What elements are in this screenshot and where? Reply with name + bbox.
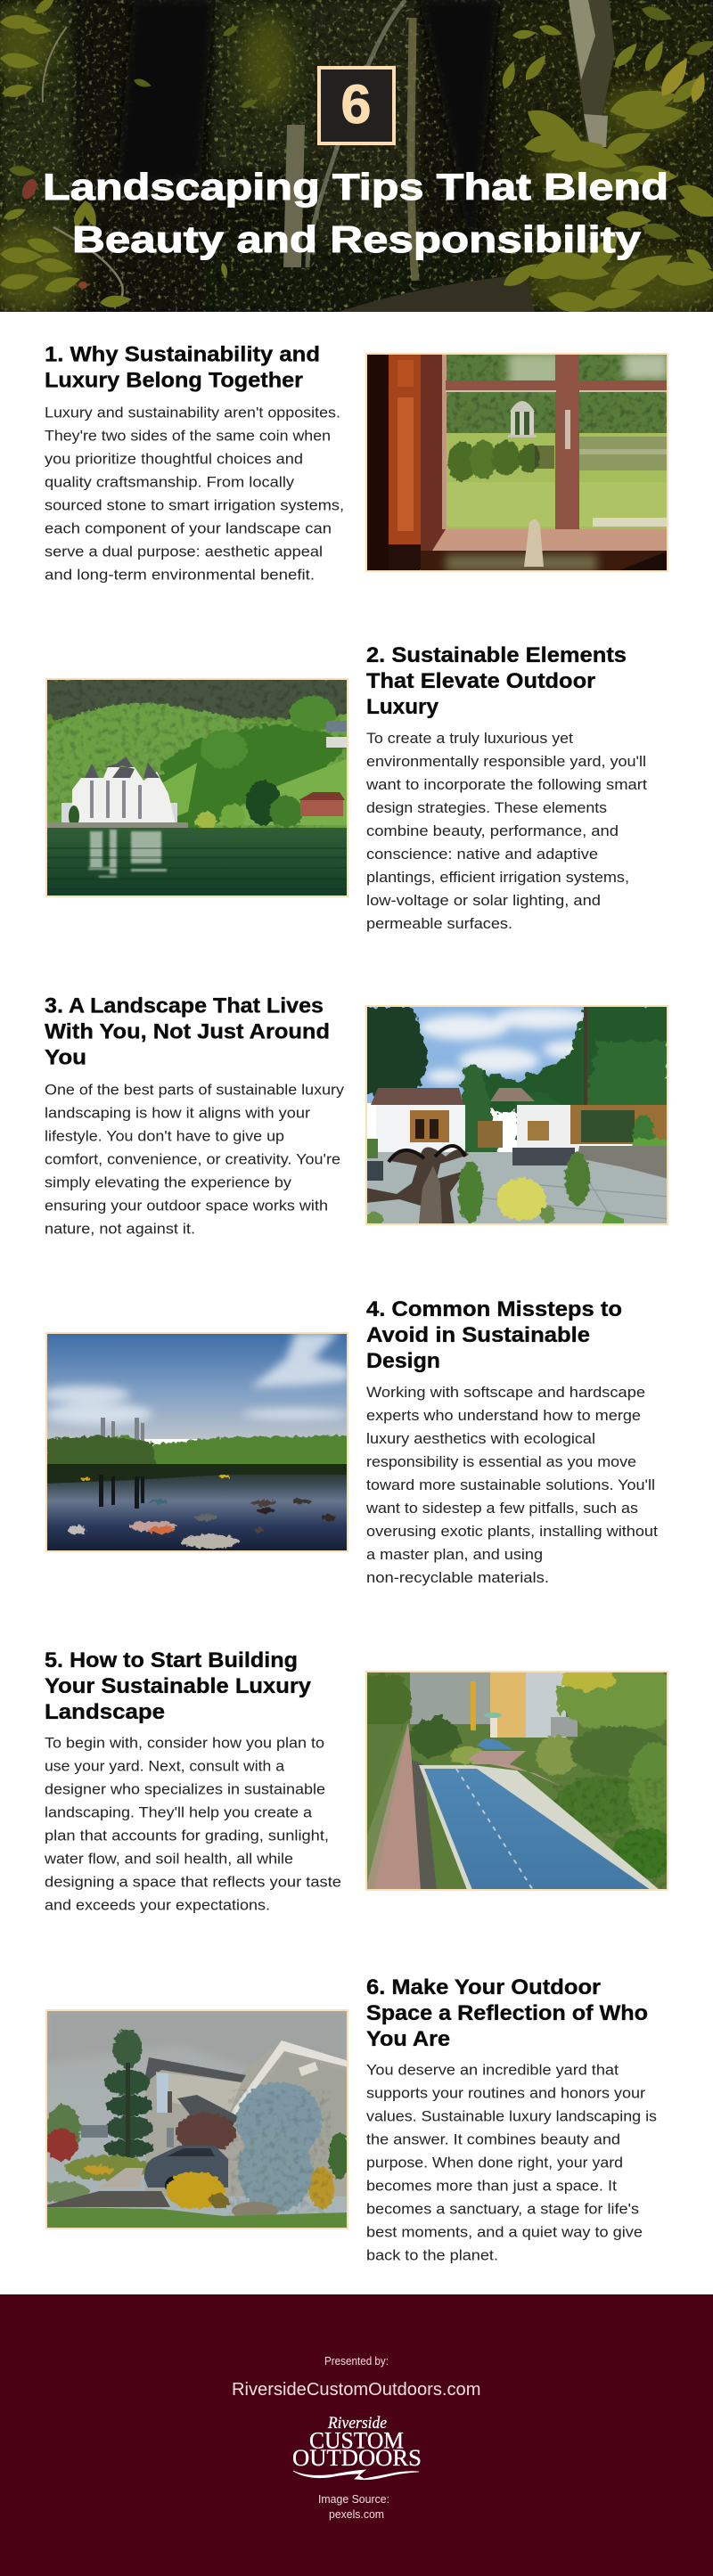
body text 1: each component of your landscape can [45,520,332,536]
main title: Landscaping Tips That Blend [43,166,668,208]
heading 2: That Elevate Outdoor [366,669,595,693]
body text 4: overusing exotic plants, installing without [366,1524,658,1540]
body text 2: design strategies. These elements [366,800,607,816]
body text 3 [45,1082,345,1237]
body text 3: nature, not against it. [45,1221,195,1237]
heading 5 [45,1648,311,1724]
body text 1: and long-term environmental benefit. [45,567,315,583]
body text 4: toward more sustainable solutions. You'll [366,1477,655,1493]
body text 2: plantings, efficient irrigation systems, [366,870,629,886]
photo: window view of garden [365,353,668,572]
body text 5: To begin with, consider how you plan to [45,1736,324,1752]
heading 5: 5. How to Start Building [45,1648,298,1672]
heading 1: 1. Why Sustainability and [45,342,320,367]
body text 4: Working with softscape and hardscape [366,1385,645,1401]
body text 6: supports your routines and honors your [366,2085,646,2101]
body text 2: low-voltage or solar lighting, and [366,893,601,909]
body text 6: becomes a sanctuary, a stage for life's [366,2201,639,2217]
heading 2: Luxury [366,695,438,719]
heading 6: Space a Reflection of Who [366,2001,648,2025]
section 4 [41,1297,658,1586]
section 2 [45,643,647,932]
photo: reflective lake with industrial stacks [41,1332,348,1552]
heading 4: Avoid in Sustainable [366,1323,590,1347]
body text 6: best moments, and a quiet way to give [366,2224,643,2240]
body text 4: responsibility is essential as you move [366,1454,636,1470]
footer panel [0,2294,713,2576]
logo: Riverside Custom Outdoors: CUSTOM [309,2427,404,2454]
body text 5: use your yard. Next, consult with a [45,1759,285,1775]
body text 1: you prioritize thoughtful choices and [45,451,303,467]
body text 3: simply elevating the experience by [45,1174,292,1190]
body text 4 [365,1385,658,1586]
section 1 [45,342,668,583]
body text 2: To create a truly luxurious yet [366,731,573,747]
body text 1: serve a dual purpose: aesthetic appeal [45,544,323,560]
body text 2: combine beauty, performance, and [366,823,619,839]
body text 3: One of the best parts of sustainable luxury [45,1082,345,1098]
heading 4 [366,1297,622,1373]
heading 6 [366,1975,648,2051]
body text 1: sourced stone to smart irrigation systems, [45,497,344,513]
body text 1 [45,405,344,583]
body text 5 [44,1736,341,1914]
heading 3 [45,994,330,1069]
number badge: 6 [341,74,371,135]
body text 2 [365,731,647,932]
logo: Riverside Custom Outdoors: Riverside [327,2414,387,2433]
section 5 [44,1648,682,1914]
heading 3: You [45,1046,86,1069]
heading 3: With You, Not Just Around [45,1019,330,1044]
body text 6 [366,2062,657,2263]
body text 2: want to incorporate the following smart [365,777,647,793]
section 6 [37,1975,657,2263]
body text 4: experts who understand how to merge [366,1408,641,1424]
heading 4: 4. Common Missteps to [366,1297,622,1321]
photo: white house with stone courtyard [365,1005,668,1226]
heading 5: Your Sustainable Luxury [45,1674,311,1698]
heading 2 [366,643,627,719]
heading 6: 6. Make Your Outdoor [366,1975,601,1999]
heading 5: Landscape [45,1700,165,1724]
website address: RiversideCustomOutdoors.com [232,2380,481,2400]
heading 2: 2. Sustainable Elements [366,643,627,667]
body text 1: They're two sides of the same coin when [45,428,331,444]
heading 3: 3. A Landscape That Lives [45,994,324,1018]
body text 5: designing a space that reflects your taste [45,1875,341,1891]
body text 5: water flow, and soil health, all while [44,1852,293,1868]
body text 5: plan that accounts for grading, sunlight, [45,1828,329,1844]
body text 2: permeable surfaces. [366,916,512,932]
image source credit: pexels.com [329,2508,384,2521]
body text 6: becomes more than just a space. It [366,2178,617,2194]
hero photo: forest path [0,0,713,312]
image source credit: Image Source: [318,2493,389,2506]
presented by label: Presented by: [324,2355,389,2367]
body text 3: comfort, convenience, or creativity. You're [45,1151,340,1167]
photo: lakeside castle and green hills [45,678,348,897]
body text 6: purpose. When done right, your yard [366,2155,623,2171]
body text 6: the answer. It combines beauty and [366,2131,620,2147]
body text 1: quality craftsmanship. From locally [45,474,295,490]
body text 6: values. Sustainable luxury landscaping is [366,2108,657,2124]
body text 4: a master plan, and using [366,1547,543,1563]
body text 1: Luxury and sustainability aren't opposites. [45,405,340,421]
body text 4: want to sidestep a few pitfalls, such as [365,1501,638,1517]
body text 3: ensuring your outdoor space works with [45,1198,328,1214]
image source credit [318,2493,389,2521]
body text 2: environmentally responsible yard, you'll [366,754,646,770]
body text 4: luxury aesthetics with ecological [366,1431,595,1447]
main title: Beauty and Responsibility [72,218,642,260]
body text 5: and exceeds your expectations. [45,1898,270,1914]
body text 6: You deserve an incredible yard that [366,2062,619,2078]
body text 5: landscaping. They'll help you create a [45,1805,313,1821]
body text 4: non-recyclable materials. [366,1570,549,1586]
heading 4: Design [366,1349,440,1373]
body text 6: back to the planet. [366,2247,498,2263]
body text 3: landscaping is how it aligns with your [45,1105,311,1121]
logo: Riverside Custom Outdoors [292,2414,422,2480]
header banner [0,0,713,317]
logo: Riverside Custom Outdoors: OUTDOORS [292,2445,422,2471]
heading 1: Luxury Belong Together [45,369,303,392]
photo: suburban house with topiary [37,2009,350,2229]
body text 5: designer who specializes in sustainable [45,1782,325,1798]
number badge [319,68,394,143]
heading 1 [45,342,320,392]
main title [43,166,668,260]
section 3 [45,994,668,1237]
body text 2: conscience: native and adaptive [366,846,598,863]
heading 6: You Are [366,2027,450,2051]
photo: blue garden pathway [353,1664,682,1891]
body text 3: lifestyle. You don't have to give up [45,1128,284,1144]
